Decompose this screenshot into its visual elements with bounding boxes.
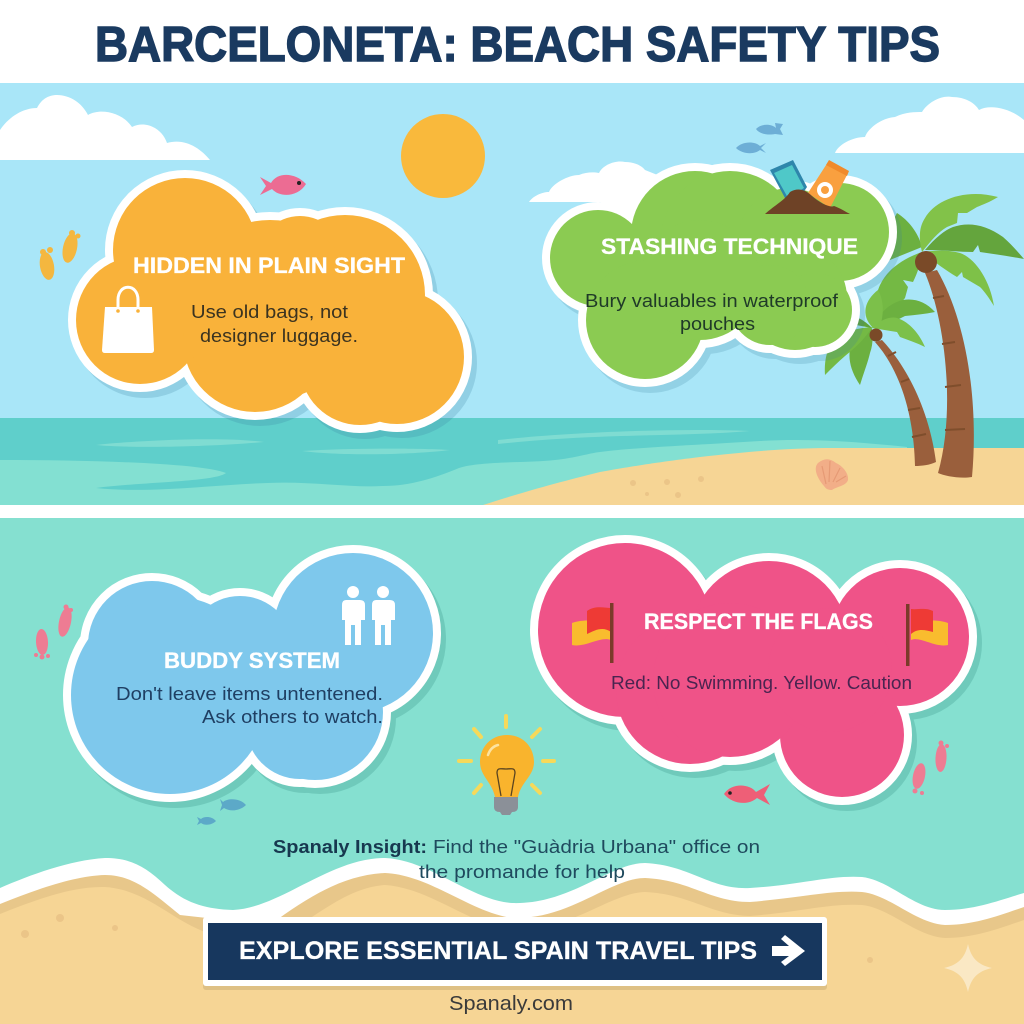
- icon: bag: [102, 287, 154, 353]
- icon: lightbulb: [459, 716, 554, 815]
- icon: two people: [342, 586, 395, 645]
- button label: EXPLORE ESSENTIAL SPAIN TRAVEL TIPS: [239, 937, 757, 965]
- icon: orange footprints: [38, 230, 80, 281]
- panel: hidden in plain sight: [76, 178, 469, 431]
- text: spanaly insight: Spanaly Insight:: [273, 836, 427, 857]
- icon: small blue fish bottom: [197, 799, 246, 825]
- text: bury valuables: pouches: [680, 314, 755, 334]
- panel: respect the flags: [538, 543, 974, 803]
- text: don't leave items: Ask others to watch.: [202, 707, 383, 727]
- heading: buddy system: BUDDY SYSTEM: [164, 648, 340, 673]
- icon: pink fish top: [260, 175, 306, 195]
- panel: lower teal background: [0, 518, 1024, 918]
- button: call to action: [203, 917, 827, 990]
- icon: pink fish bottom: [724, 784, 770, 805]
- cloud: top right: [835, 97, 1024, 153]
- text: spanaly insight: Find the "Guàdria Urbana" office on: [433, 836, 760, 857]
- text: spanaly insight: the promande for help: [419, 861, 625, 882]
- panel: beach scene: [0, 83, 1024, 505]
- cloud: behind green panel: [529, 162, 670, 215]
- icon: left flag: [572, 603, 614, 663]
- icon: seashell: [816, 459, 848, 490]
- title: BARCELONETA: BEACH SAFETY TIPS: [95, 18, 940, 72]
- panel: stashing technique: [550, 160, 894, 385]
- icon: palm trees: [825, 194, 1024, 478]
- icon: sparkle: [944, 944, 992, 992]
- text: flag meanings: Red: No Swimming. Yellow. Caution: [611, 673, 912, 693]
- heading: stashing technique: STASHING TECHNIQUE: [601, 234, 858, 259]
- text: don't leave items: Don't leave items untentened.: [116, 684, 383, 704]
- icon: right flag: [906, 604, 948, 666]
- icon: pink footprints left: [34, 604, 74, 660]
- icon: phone and sunscreen in sand: [765, 160, 850, 214]
- panel: buddy system: [71, 553, 438, 800]
- icon: pink footprints right: [910, 740, 949, 795]
- text: site url: Spanaly.com: [449, 993, 573, 1015]
- text: bury valuables: Bury valuables in waterproof: [585, 291, 839, 311]
- panel: sand foreground: [0, 858, 1024, 1024]
- text: use old bags: Use old bags, not: [191, 302, 348, 322]
- text: use old bags: designer luggage.: [200, 326, 358, 346]
- sun: [401, 114, 485, 198]
- icon: small blue fish top: [736, 123, 783, 153]
- heading: hidden in plain sight: HIDDEN IN PLAIN SIGHT: [133, 253, 406, 278]
- cloud: top left: [0, 95, 210, 160]
- icon: arrow: [772, 935, 805, 966]
- heading: respect the flags: RESPECT THE FLAGS: [644, 609, 873, 634]
